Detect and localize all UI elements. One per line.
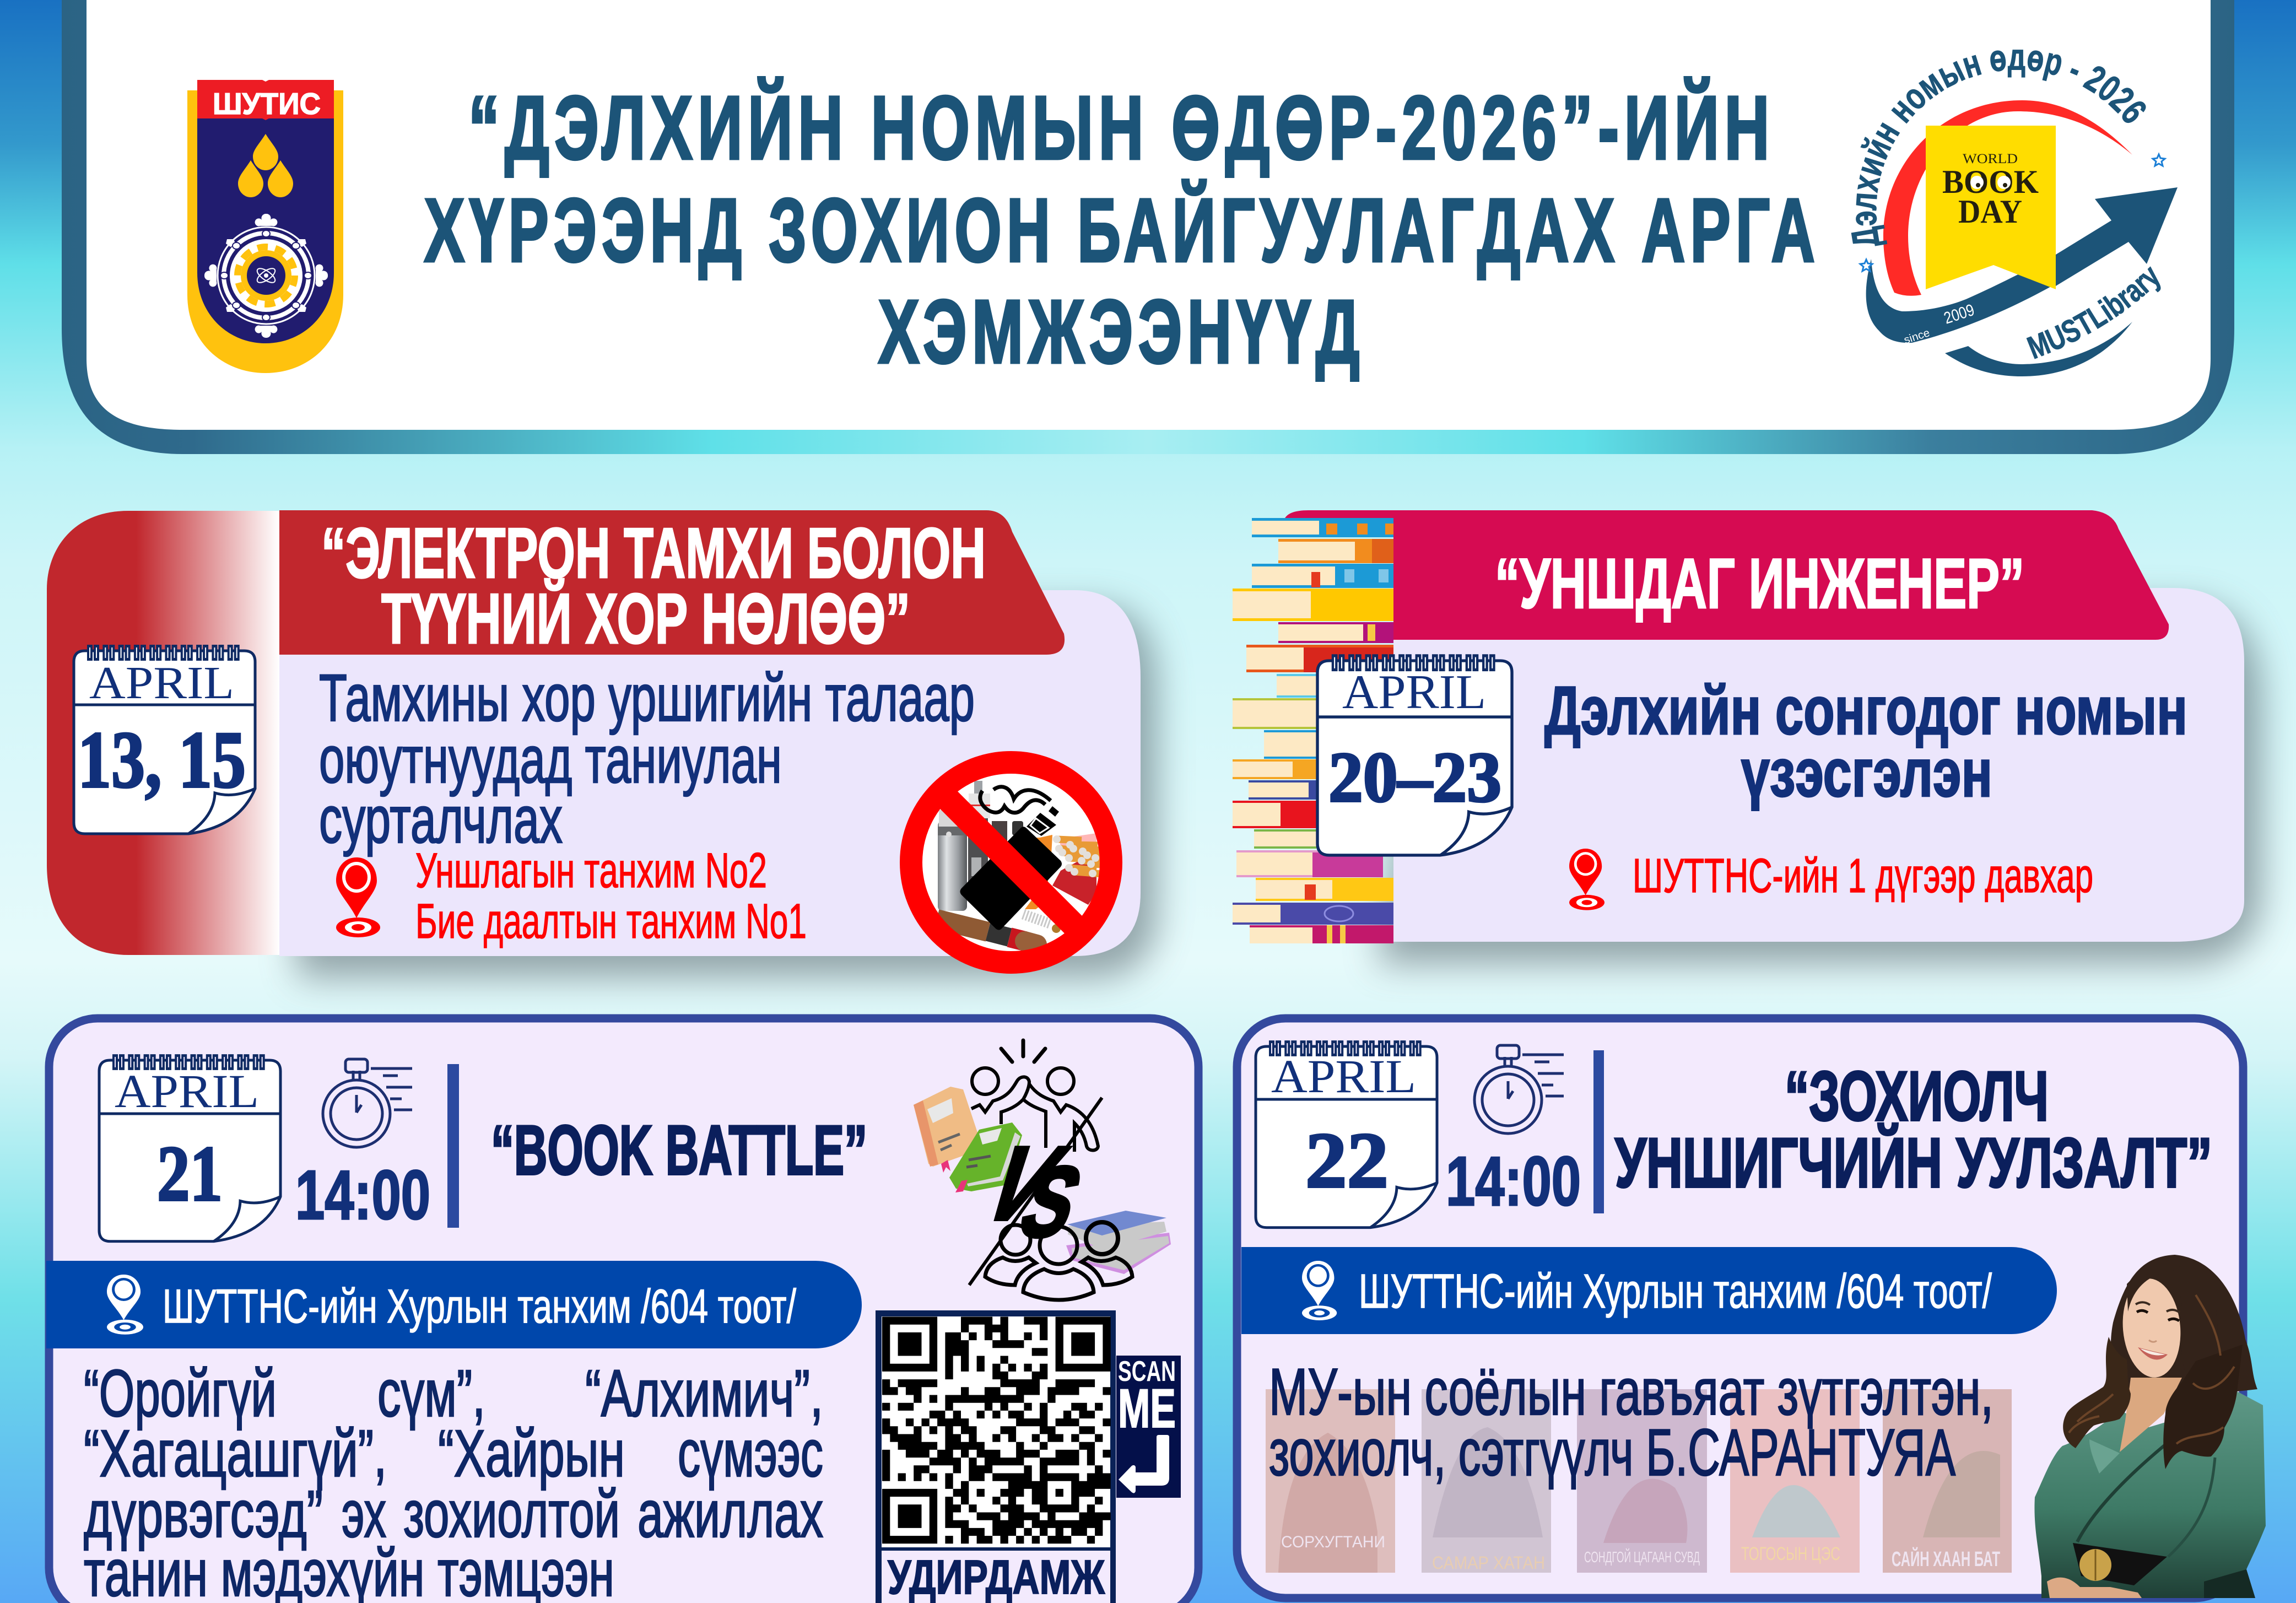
QR code block: УДИРДАМЖ <box>888 1551 1105 1603</box>
location text: ШУТТНС-ийн 1 дүгээр давхар <box>1633 849 2093 903</box>
world book day logo: since <box>1903 327 1931 347</box>
event description: МУ-ын соёлын гавъяат зүтгэлтэн, <box>1269 1355 1994 1429</box>
card <box>1237 1018 2243 1598</box>
panel: author meeting event <box>1237 1018 2266 1598</box>
header panel <box>62 0 2234 454</box>
event description: сүмээс <box>678 1416 823 1491</box>
scan me tag: SCAN <box>1118 1356 1176 1388</box>
calendar: April 21: APRIL <box>115 1065 259 1118</box>
event description: “Оройгүй <box>84 1356 277 1431</box>
icon: red location pin <box>336 857 380 937</box>
calendar: April 22: APRIL <box>1271 1050 1416 1103</box>
icon: stopwatch <box>1474 1045 1564 1134</box>
calendar: April 20-23 <box>1317 661 1512 855</box>
portrait of the author <box>2034 1255 2266 1598</box>
event description: оюутнуудад таниулан <box>319 722 782 797</box>
icon: no smoking sign <box>911 763 1111 962</box>
event description <box>1269 1355 1994 1489</box>
calendar: April 21: 21 <box>157 1130 223 1218</box>
calendar: April 22: 22 <box>1305 1117 1389 1205</box>
QR code block <box>876 1310 1116 1603</box>
location pill <box>1241 1247 2057 1334</box>
event description: сурталчлах <box>319 782 563 857</box>
world book day logo: WORLD <box>1963 152 2018 166</box>
faded book covers: ТОГОСЫН ЦЭС <box>1741 1543 1840 1564</box>
calendar: April 22 <box>1256 1046 1437 1228</box>
event description: “Хайрын <box>438 1416 625 1491</box>
heading: “BOOK BATTLE” <box>491 1111 867 1189</box>
scan me tag <box>1116 1356 1181 1498</box>
time: 14:00 <box>1446 1142 1581 1220</box>
event description: “Хагацашгүй”, <box>84 1416 387 1491</box>
location pill: ШУТТНС-ийн Хурлын танхим /604 тоот/ <box>163 1280 796 1333</box>
event description: ажиллах <box>638 1476 823 1551</box>
panel: reading engineer event <box>1233 510 2262 964</box>
world book day logo: 2009 <box>1942 301 1976 328</box>
header white card <box>87 0 2211 430</box>
university shield logo: ШУТИС <box>213 87 321 121</box>
faded book covers: САМАР ХАТАН <box>1432 1553 1545 1573</box>
main title <box>424 77 1820 382</box>
panel: book battle event <box>46 1018 1198 1603</box>
versus illustration <box>914 1040 1171 1300</box>
faded book covers: СОРХУГТАНИ <box>1281 1533 1385 1551</box>
location text: Бие даалтын танхим No1 <box>415 893 807 948</box>
card <box>49 1018 1198 1603</box>
event description <box>1544 673 2187 811</box>
lavender card <box>1393 588 2244 942</box>
panel: e-cigarette event <box>47 510 1157 978</box>
event description: зохиолч, сэтгүүлч Б.САРАНТУЯА <box>1269 1416 1955 1489</box>
panel shadow <box>1377 603 2262 964</box>
icon: white location pin <box>1302 1261 1337 1320</box>
header frame <box>62 0 2234 454</box>
faded book covers <box>1266 1389 2012 1573</box>
red banner with heading: “ЭЛЕКТРОН ТАМХИ БОЛОН <box>321 514 986 593</box>
event description: “Алхимич”, <box>585 1356 823 1431</box>
location text: Уншлагын танхим No2 <box>415 843 767 898</box>
crimson banner with heading: “УНШДАГ ИНЖЕНЕР” <box>1495 544 2024 623</box>
calendar: April 20-23: 20–23 <box>1328 738 1501 817</box>
heading <box>1615 1057 2212 1202</box>
red banner with heading: ТҮҮНИЙ ХОР НӨЛӨӨ” <box>381 578 910 659</box>
event description: сүм”, <box>377 1356 485 1431</box>
calendar: April 21 <box>99 1060 280 1242</box>
world book day logo: DAY <box>1958 193 2022 230</box>
calendar: April 13, 15: 13, 15 <box>78 715 246 805</box>
faded book covers: СОНДГОЙ ЦАГААН СУВД <box>1584 1548 1700 1566</box>
divider bar <box>1593 1050 1604 1213</box>
icon: white location pin <box>107 1275 143 1335</box>
world book day logo: MUSTLibrary <box>2027 266 2161 359</box>
lavender card <box>279 590 1141 956</box>
location pill <box>46 1261 862 1348</box>
event description: дүрвэгсэд” <box>84 1476 323 1551</box>
event description <box>84 1356 823 1603</box>
book stack illustration <box>1233 518 1393 943</box>
event description <box>319 660 975 857</box>
versus illustration: V <box>961 1125 1084 1242</box>
calendar: April 20-23: APRIL <box>1342 666 1486 719</box>
world book day logo: Дэлхийн номын өдөр - 2026 <box>1851 50 2146 246</box>
location text <box>415 843 807 948</box>
divider bar <box>447 1064 459 1228</box>
university shield logo <box>187 80 343 373</box>
red gradient side <box>47 511 279 955</box>
location pill: ШУТТНС-ийн Хурлын танхим /604 тоот/ <box>1359 1265 1992 1318</box>
crimson banner with heading <box>1284 510 2169 640</box>
world book day logo <box>1851 50 2178 376</box>
time: 14:00 <box>295 1156 430 1234</box>
event description: зохиолтой <box>403 1476 620 1551</box>
scan me tag: ME <box>1118 1378 1176 1439</box>
red banner with heading <box>279 510 1065 659</box>
panel shadow <box>279 606 1157 978</box>
world book day logo: BOOK <box>1942 164 2039 200</box>
event description: үзэсгэлэн <box>1741 736 1992 811</box>
event description: Тамхины хор уршигийн талаар <box>319 660 975 735</box>
heading: “ЗОХИОЛЧ <box>1785 1057 2049 1135</box>
event description: эх <box>342 1476 386 1551</box>
faded book covers: САЙН ХААН БАТ <box>1892 1546 2000 1571</box>
calendar: April 13, 15: APRIL <box>89 657 234 709</box>
icon: stopwatch <box>323 1059 412 1147</box>
icon: red location pin <box>1569 849 1605 910</box>
calendar: April 13, 15 <box>74 651 255 834</box>
main title: ХЭМЖЭЭНҮҮД <box>878 281 1365 382</box>
versus illustration: S <box>1007 1146 1095 1257</box>
